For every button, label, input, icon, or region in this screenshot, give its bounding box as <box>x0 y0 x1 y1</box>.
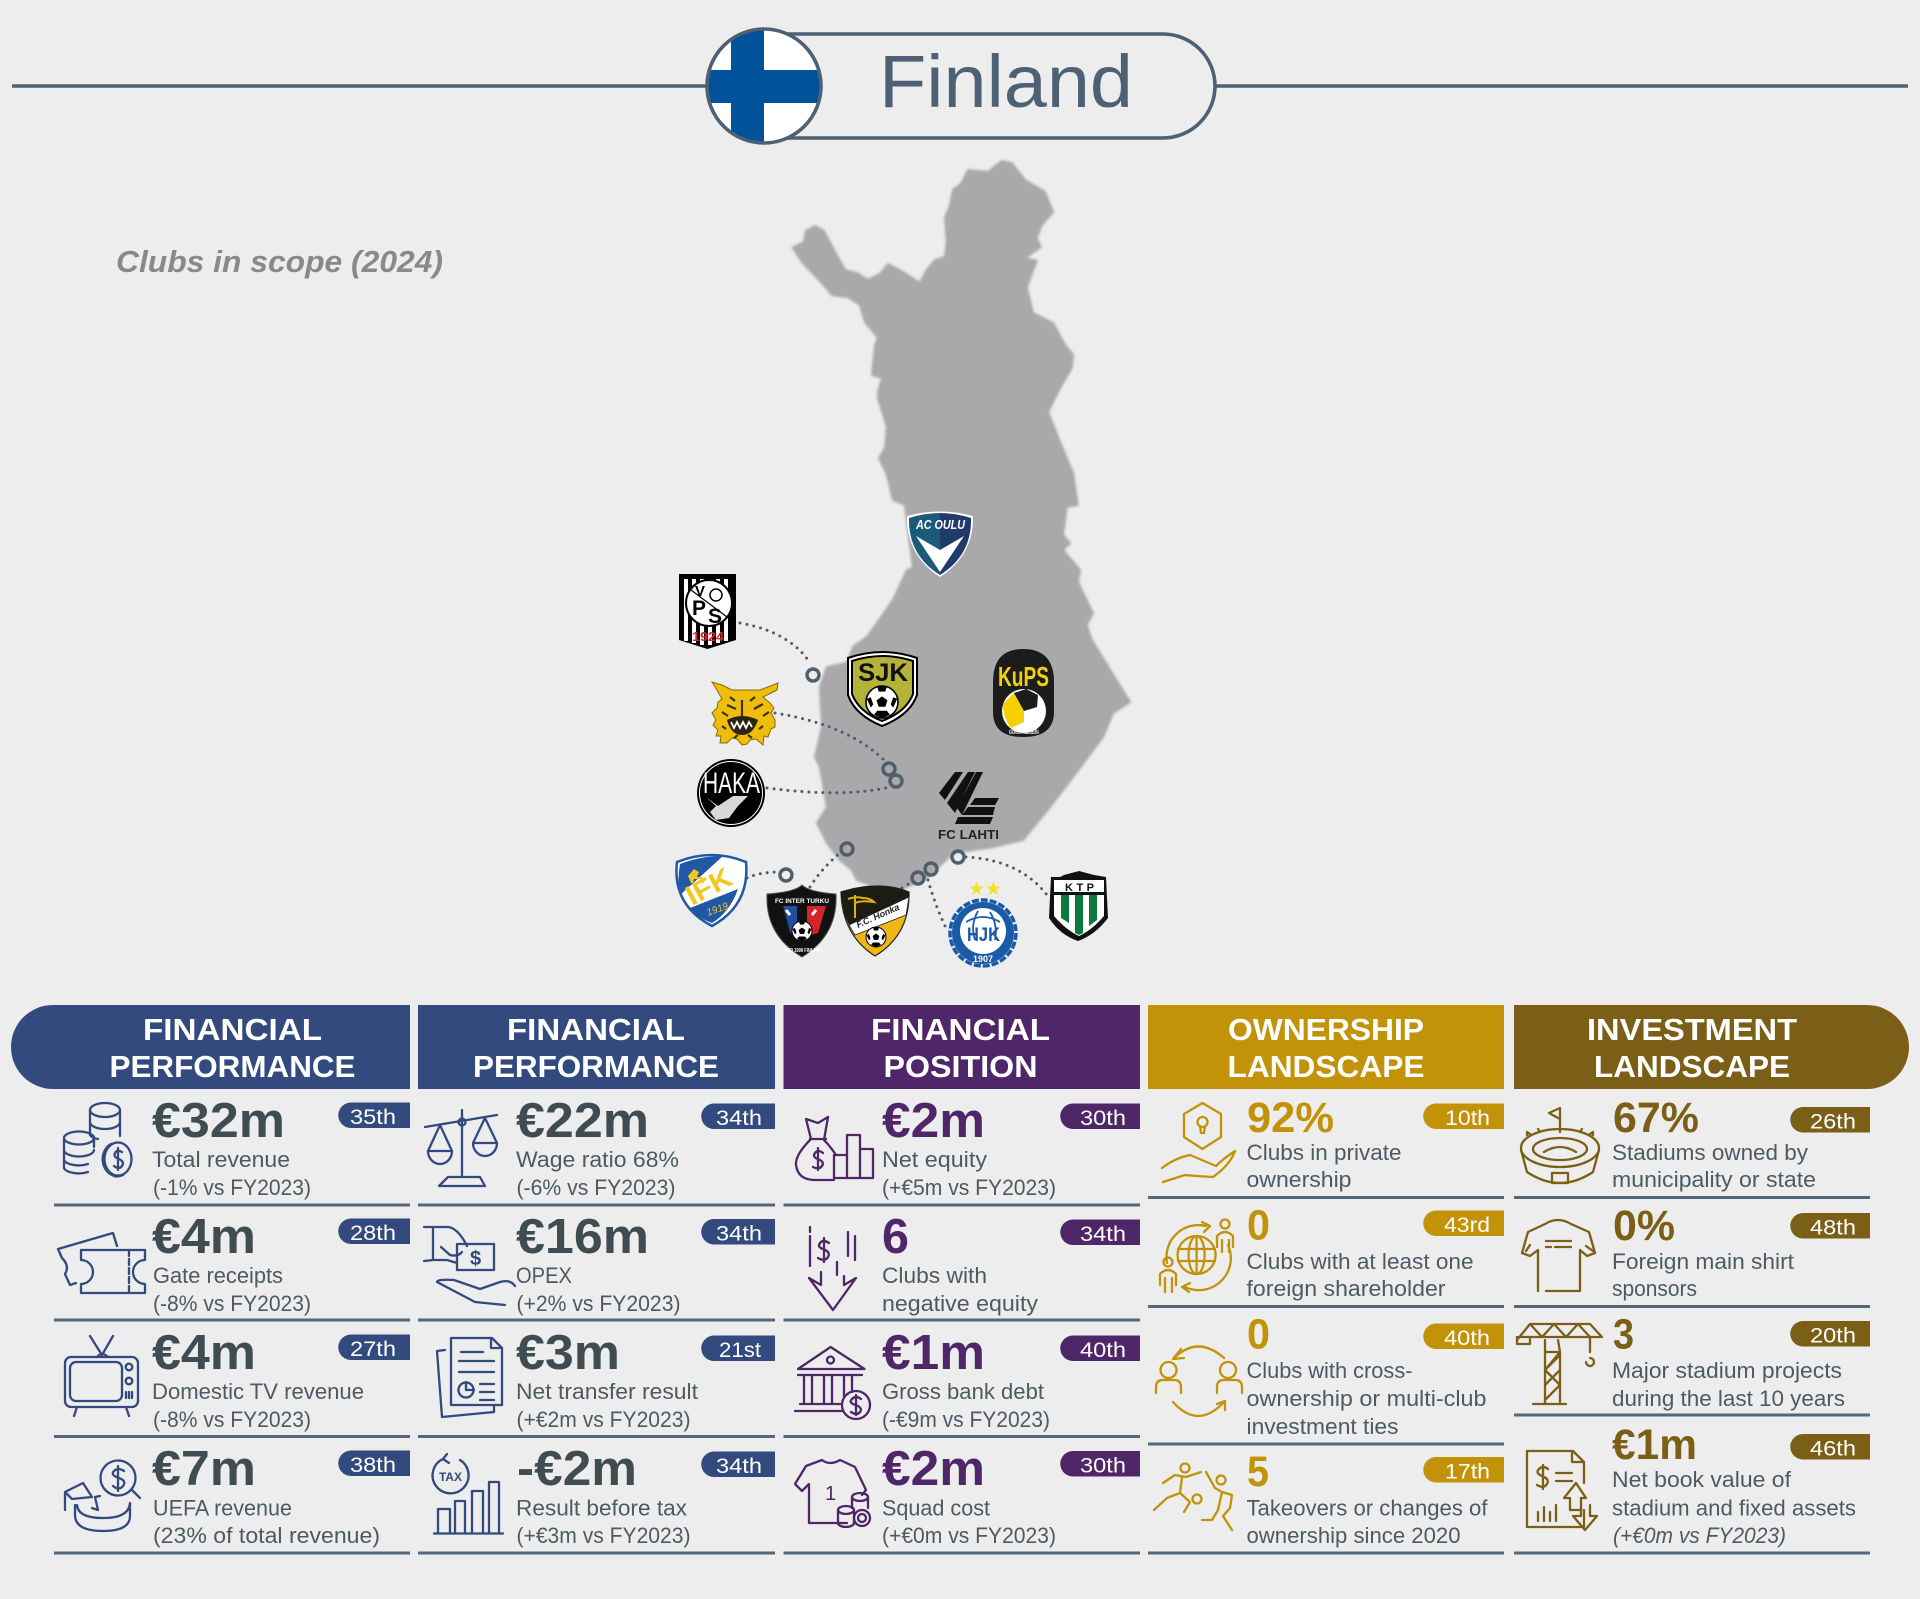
logo: KuPS <box>993 649 1054 737</box>
logo: IFK <box>676 855 746 926</box>
logo: SJK <box>848 652 917 726</box>
logo: Inter Turku: FC INTER TURKU <box>775 898 829 905</box>
heading: FINANCIAL <box>143 1012 322 1047</box>
logo: Inter Turku <box>767 885 836 957</box>
rank badge <box>1060 1336 1140 1362</box>
description <box>516 1263 680 1316</box>
rank badge: 43rd <box>1444 1214 1490 1237</box>
rank badge <box>338 1102 410 1129</box>
description: Result before tax <box>516 1496 688 1520</box>
heading: LANDSCAPE <box>1228 1049 1424 1084</box>
metric: domestic TV revenue <box>65 1326 410 1432</box>
description <box>1246 1140 1402 1192</box>
icon: hands and banknote: $ <box>470 1248 481 1270</box>
metric: net equity <box>796 1094 1140 1200</box>
rank badge: 10th <box>1445 1107 1490 1130</box>
rank badge: 34th <box>716 1455 762 1478</box>
description: Net book value of <box>1612 1467 1792 1492</box>
logo: FC Honka: F.C. Honka <box>855 902 901 930</box>
logo: Haka: HAKA <box>703 767 760 800</box>
description: Gate receipts <box>153 1263 283 1288</box>
description: Major stadium projects <box>1612 1358 1842 1383</box>
description: (-8% vs FY2023) <box>153 1407 311 1432</box>
rank badge <box>1423 1324 1504 1350</box>
metric: foreign shirt sponsors <box>1522 1202 1870 1301</box>
location markers <box>780 669 964 884</box>
value: €16m <box>516 1210 649 1264</box>
logo: Inter Turku: ÅBO 1990 FINLAND <box>784 947 822 954</box>
value: €4m <box>152 1210 256 1264</box>
icon: crane <box>1517 1324 1602 1404</box>
value: €7m <box>152 1442 256 1496</box>
description <box>152 1147 311 1200</box>
heading: PERFORMANCE <box>110 1049 356 1084</box>
value: 67% <box>1613 1094 1699 1142</box>
title banner: Finland <box>12 26 1908 146</box>
rank badge: 27th <box>350 1338 396 1361</box>
description: (-1% vs FY2023) <box>153 1175 311 1200</box>
rank badge <box>701 1104 775 1130</box>
logo: SJK: SJK <box>858 659 908 687</box>
icon: bank <box>795 1347 870 1419</box>
metric: cross-ownership <box>1156 1310 1504 1439</box>
description: municipality or state <box>1612 1167 1816 1192</box>
logo: VPS <box>679 574 736 649</box>
subtitle: clubs in scope: Clubs in scope (2024) <box>116 244 443 279</box>
rank badge: 40th <box>1080 1339 1126 1362</box>
description <box>1612 1358 1845 1411</box>
metric: clubs with negative equity <box>809 1210 1140 1316</box>
logo: FC Lahti <box>938 772 999 842</box>
description: (-8% vs FY2023) <box>153 1291 311 1316</box>
panel: financial performance (costs) <box>418 1005 775 1553</box>
metric: total revenue <box>64 1094 410 1200</box>
description: OPEX <box>516 1263 572 1288</box>
description: investment ties <box>1246 1414 1398 1439</box>
heading: POSITION <box>884 1049 1038 1084</box>
icon: shirt <box>1522 1220 1595 1291</box>
icon: footballers <box>1154 1464 1232 1530</box>
value: €32m <box>152 1094 285 1148</box>
value: €2m <box>882 1442 985 1496</box>
description: (+€5m vs FY2023) <box>882 1175 1056 1200</box>
heading <box>1514 1005 1909 1089</box>
heading: OWNERSHIP <box>1228 1012 1424 1047</box>
description: Foreign main shirt <box>1612 1249 1795 1274</box>
description <box>1612 1140 1816 1192</box>
description <box>152 1379 364 1432</box>
logo: VPS: V <box>695 583 705 600</box>
metric: foreign shareholder <box>1160 1202 1504 1301</box>
description: ownership <box>1246 1167 1352 1192</box>
icon: shirt and coins <box>795 1460 870 1527</box>
heading <box>11 1005 410 1089</box>
description <box>882 1496 1056 1548</box>
description: Net equity <box>882 1147 988 1172</box>
title text: Finland <box>879 40 1133 123</box>
heading <box>784 1005 1140 1089</box>
icon: hands and banknote <box>424 1227 515 1305</box>
rank badge <box>1060 1451 1140 1478</box>
description: Domestic TV revenue <box>152 1379 364 1404</box>
description: (+2% vs FY2023) <box>516 1291 680 1316</box>
description: (+€0m vs FY2023) <box>882 1523 1056 1548</box>
panel: financial position <box>784 1005 1140 1553</box>
logo: FC Lahti: FC LAHTI <box>938 828 999 842</box>
logo: AC Oulu: AC OULU <box>915 518 966 532</box>
icon: tax and bars <box>433 1454 503 1534</box>
panel: investment landscape <box>1514 1005 1909 1553</box>
metric: UEFA revenue <box>65 1442 410 1548</box>
icon: financial document <box>1527 1451 1597 1530</box>
description <box>516 1496 690 1548</box>
description: (23% of total revenue) <box>153 1523 380 1548</box>
value: €3m <box>516 1326 620 1380</box>
value: €22m <box>516 1094 649 1148</box>
description <box>882 1379 1050 1432</box>
rank badge: 30th <box>1080 1107 1126 1130</box>
metric: stadiums owned <box>1521 1094 1870 1192</box>
description <box>1246 1358 1486 1439</box>
logo: IFK: IFK <box>680 861 737 911</box>
icon: document <box>437 1338 502 1417</box>
heading: INVESTMENT <box>1587 1012 1797 1047</box>
description: ownership since 2020 <box>1246 1523 1460 1548</box>
logo: HJK <box>950 879 1016 966</box>
value: 92% <box>1247 1094 1334 1142</box>
value: 0 <box>1247 1310 1270 1358</box>
logo: HJK: HJK <box>967 925 1000 946</box>
metric: gate receipts <box>58 1210 410 1316</box>
value: €4m <box>152 1326 256 1380</box>
description: Stadiums owned by <box>1612 1140 1809 1165</box>
heading: FINANCIAL <box>507 1012 685 1047</box>
logo: KTP: KTP <box>1065 882 1094 894</box>
rank badge <box>1423 1210 1504 1237</box>
metric: result before tax <box>433 1442 775 1548</box>
rank badge <box>1423 1457 1504 1484</box>
description: Takeovers or changes of <box>1246 1496 1488 1520</box>
icon: falling arrow <box>809 1227 856 1310</box>
icon: Finnish flag <box>704 26 824 146</box>
icon: globe and people <box>1160 1220 1233 1292</box>
rank badge: 48th <box>1810 1216 1856 1240</box>
description: Squad cost <box>882 1496 991 1520</box>
value: -€2m <box>517 1442 637 1496</box>
logo: HJK: 1907 <box>973 954 993 964</box>
icon: shirt and coins: 1 <box>825 1483 836 1505</box>
description <box>153 1496 380 1548</box>
logo: HJK: ★ <box>968 879 985 900</box>
logo: VPS: P <box>692 597 706 620</box>
icon: two people with arrows <box>1156 1346 1242 1416</box>
description <box>1612 1467 1856 1548</box>
metric: OPEX <box>424 1210 775 1316</box>
logo: VPS: 1924 <box>692 629 725 644</box>
description: UEFA revenue <box>153 1496 292 1520</box>
rank badge: 28th <box>350 1222 396 1245</box>
rank badge <box>701 1336 775 1362</box>
rank badge <box>1060 1104 1140 1130</box>
icon: revenue pie with magnifier <box>65 1460 140 1531</box>
icon: stadium <box>1521 1108 1599 1183</box>
description: Net transfer result <box>516 1379 699 1404</box>
description: ownership or multi-club <box>1246 1386 1486 1411</box>
description <box>1246 1249 1474 1301</box>
icon: scales <box>425 1110 497 1186</box>
rank badge <box>338 1334 410 1361</box>
rank badge: 34th <box>716 1107 762 1130</box>
rank badge <box>1790 1213 1870 1240</box>
rank badge <box>1060 1220 1140 1246</box>
description: Total revenue <box>152 1147 290 1172</box>
value: €2m <box>882 1094 985 1148</box>
rank badge <box>701 1219 775 1246</box>
metric: takeovers <box>1154 1448 1504 1548</box>
heading: FINANCIAL <box>871 1012 1050 1047</box>
description: Gross bank debt <box>882 1379 1045 1404</box>
description: Clubs in private <box>1246 1140 1402 1165</box>
rank badge <box>1790 1434 1870 1460</box>
rank badge <box>1423 1104 1504 1130</box>
description: (+€3m vs FY2023) <box>516 1523 690 1548</box>
rank badge: 38th <box>350 1454 396 1477</box>
description: Clubs with cross- <box>1246 1358 1412 1383</box>
icon: shield and hand <box>1162 1103 1235 1182</box>
icon: tickets <box>58 1233 145 1293</box>
rank badge <box>1790 1321 1870 1348</box>
description: sponsors <box>1612 1276 1697 1301</box>
rank badge: 46th <box>1810 1438 1856 1460</box>
logo: IFK: 1919 <box>705 901 730 919</box>
value: 6 <box>882 1210 909 1264</box>
metric: net transfer result <box>437 1326 775 1432</box>
logo: Ilves <box>712 682 778 745</box>
panel: ownership landscape <box>1148 1005 1504 1553</box>
description: foreign shareholder <box>1246 1276 1446 1301</box>
description: negative equity <box>882 1291 1039 1316</box>
rank badge <box>338 1218 410 1245</box>
value: 5 <box>1247 1448 1269 1496</box>
icon: money bag and bars <box>796 1117 873 1180</box>
logo: AC Oulu <box>907 512 973 577</box>
heading <box>1148 1005 1504 1089</box>
description: (+€0m vs FY2023) <box>1613 1523 1786 1548</box>
description: (-€9m vs FY2023) <box>882 1407 1050 1432</box>
logo: KuPS: KuPS <box>998 661 1049 692</box>
rank badge: 20th <box>1810 1324 1856 1348</box>
metric: wage ratio <box>425 1094 775 1200</box>
description: (-6% vs FY2023) <box>516 1175 676 1200</box>
rank badge <box>338 1450 410 1477</box>
rank badge: 17th <box>1445 1460 1490 1484</box>
description: stadium and fixed assets <box>1612 1496 1856 1520</box>
value: 3 <box>1613 1310 1634 1358</box>
rank badge: 35th <box>350 1106 396 1129</box>
description <box>882 1147 1056 1200</box>
metric: net book value <box>1527 1421 1870 1548</box>
description: Clubs with at least one <box>1246 1249 1474 1274</box>
value: €1m <box>882 1326 985 1380</box>
description <box>882 1263 1039 1316</box>
rank badge: 30th <box>1080 1454 1126 1478</box>
rank badge: 21st <box>719 1339 761 1362</box>
map of Finland <box>793 161 1130 890</box>
icon: television <box>65 1336 138 1416</box>
logo: KTP <box>1049 871 1108 941</box>
rank badge <box>1790 1107 1870 1134</box>
value: 0% <box>1613 1202 1675 1250</box>
logo: VPS: S <box>708 605 722 628</box>
rank badge: 40th <box>1444 1327 1490 1350</box>
description: during the last 10 years <box>1612 1386 1845 1411</box>
description <box>516 1379 699 1432</box>
description: (+€2m vs FY2023) <box>516 1407 690 1432</box>
icon: coins <box>64 1103 132 1176</box>
panel: financial performance (revenue) <box>11 1005 410 1553</box>
rank badge: 26th <box>1810 1110 1856 1134</box>
rank badge: 34th <box>1080 1223 1126 1246</box>
logo: Haka <box>697 759 765 827</box>
heading <box>418 1005 775 1089</box>
description <box>516 1147 679 1200</box>
description <box>1612 1249 1795 1301</box>
description: Wage ratio 68% <box>516 1147 679 1172</box>
value: 0 <box>1247 1202 1270 1250</box>
description <box>1246 1496 1488 1548</box>
heading: LANDSCAPE <box>1594 1049 1790 1084</box>
metric: squad cost <box>795 1442 1140 1548</box>
metric: gross bank debt <box>795 1326 1140 1432</box>
logo: HJK: ★ <box>985 879 1002 900</box>
logo: FC Honka <box>841 886 909 956</box>
metric: private ownership <box>1162 1094 1504 1192</box>
logo: KuPS: KUOPION PALLOSEURA <box>1009 729 1039 736</box>
metric: stadium projects <box>1517 1310 1870 1411</box>
description <box>153 1263 311 1316</box>
description: Clubs with <box>882 1263 987 1288</box>
connector lines <box>740 623 1047 928</box>
value: €1m <box>1612 1421 1697 1469</box>
icon: tax and bars: TAX <box>439 1470 462 1484</box>
rank badge: 34th <box>716 1222 762 1246</box>
heading: PERFORMANCE <box>473 1049 719 1084</box>
rank badge <box>701 1452 775 1478</box>
